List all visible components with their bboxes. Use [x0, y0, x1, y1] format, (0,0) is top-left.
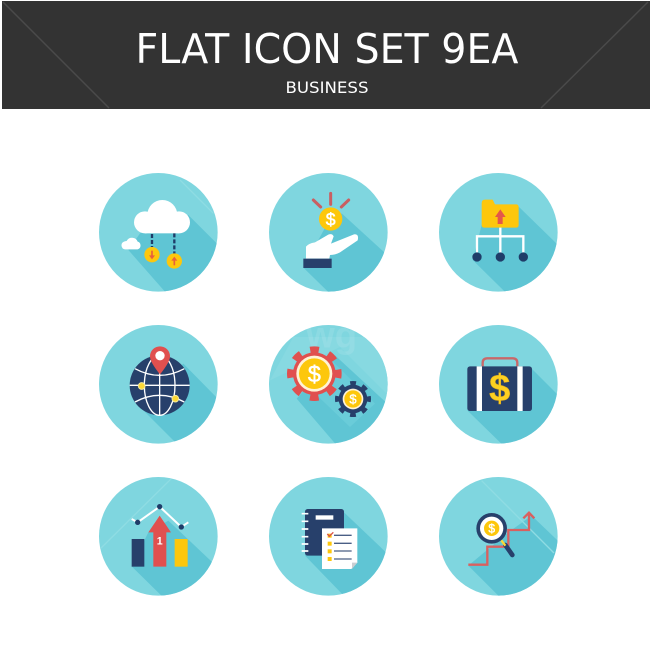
- icon: money briefcase: [439, 325, 558, 444]
- growth arrow: [468, 513, 534, 565]
- straps: [477, 366, 523, 411]
- navy bar: [132, 539, 144, 567]
- watermark: wg: [305, 315, 357, 356]
- small cloud: [122, 238, 141, 249]
- icon: magnifier and growth arrow: [439, 477, 558, 596]
- notebook: [302, 509, 344, 556]
- nodes: [472, 252, 528, 262]
- large gear: [290, 350, 338, 398]
- icon: hand with coin: [269, 173, 388, 292]
- tree connectors: [477, 228, 523, 253]
- icon: ranking bar chart: [99, 477, 218, 596]
- icon: cloud transfer: [99, 173, 218, 292]
- pin: [150, 346, 170, 374]
- red arrow bar: 1: [157, 536, 163, 548]
- upload coin: [167, 253, 182, 269]
- dollar sign: $: [489, 368, 510, 410]
- globe: [130, 355, 190, 415]
- location dots: [138, 383, 179, 402]
- connector lines: [152, 233, 174, 254]
- large cloud: [134, 200, 190, 233]
- folder: [482, 200, 519, 228]
- large gear: $: [308, 361, 321, 387]
- sleeve: [303, 259, 332, 268]
- icon: money gears: [269, 325, 388, 444]
- icon: notebook and checklist: [269, 477, 388, 596]
- checklist paper: [322, 528, 357, 569]
- coin: $: [326, 209, 336, 229]
- case body: [467, 366, 532, 411]
- small gear: [337, 383, 369, 415]
- magnifier: $: [488, 522, 495, 536]
- icon: globe with location pin: [99, 325, 218, 444]
- yellow bar: [175, 539, 188, 567]
- trend line: [132, 504, 188, 530]
- icon: folder hierarchy: [439, 173, 558, 292]
- small gear: $: [349, 392, 357, 407]
- hand: [306, 234, 358, 259]
- rays: [313, 193, 349, 207]
- title: FLAT ICON SET 9EA: [136, 25, 518, 73]
- subtitle: BUSINESS: [286, 78, 368, 97]
- upload arrow: [495, 209, 506, 224]
- header banner: [2, 1, 650, 109]
- handle: [483, 358, 517, 366]
- download coin: [144, 247, 160, 262]
